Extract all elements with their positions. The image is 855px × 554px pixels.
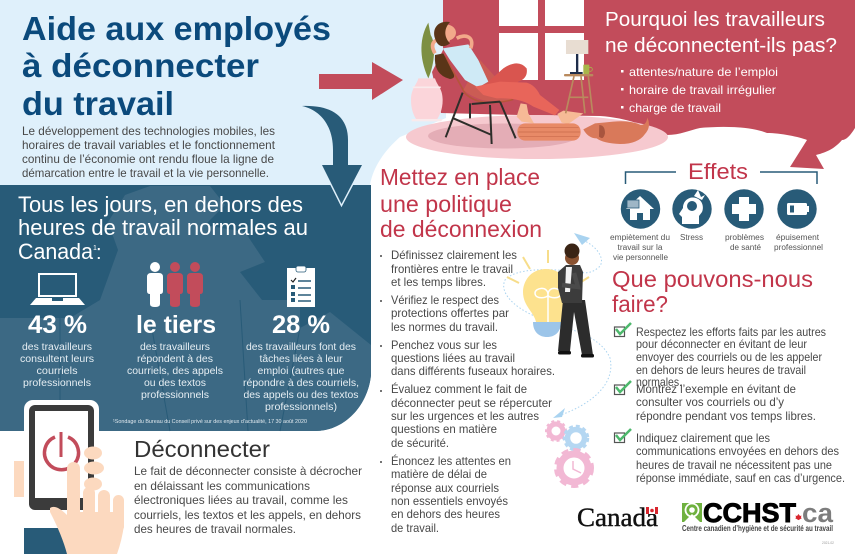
list: what can we do: Respectez les efforts faits par les autres (636, 326, 826, 339)
list: policy actions: sur les urgences et les autres (391, 410, 539, 423)
list: policy actions: de travail. (391, 522, 439, 535)
text block: definition of disconnecting: courriels, les textos et les appels, en dehors (134, 509, 361, 522)
woman, chair, plant, lamp and dog (411, 22, 649, 144)
intro text block: horaires de travail variables et le fonctionnement (22, 139, 276, 152)
list: policy actions: matière de délai de (391, 468, 487, 481)
heading: mettez en place une politique de déconnexion: Mettez en place (380, 164, 540, 190)
footnote: ¹Sondage du Bureau du Conseil privé sur des enjeux d’actualité, 17 30 août 2020 (113, 419, 307, 425)
stat: 28 %: emploi (autres que (258, 366, 345, 377)
stat: 43 %: consultent leurs (20, 354, 94, 365)
icon: clipboard checklist (287, 266, 315, 307)
text block: definition of disconnecting: électroniques liées au travail, comme les (134, 494, 348, 507)
heading: mettez en place une politique de déconnexion: une politique (380, 191, 512, 217)
title (22, 11, 331, 123)
lamp, mug and side table (566, 40, 588, 54)
list: what can we do: réponse immédiate, sauf en cas d’urgence. (636, 472, 845, 485)
list: what can we do: consulter vos courriels ou d’y (636, 396, 784, 409)
icon: work encroaching on home (621, 189, 660, 229)
list: what can we do: normales. (636, 376, 682, 389)
list: policy actions (380, 249, 555, 535)
icon: three people, one white and two red (147, 262, 203, 307)
text block: definition of disconnecting: en délaissant les communications (134, 480, 310, 493)
stat: 43 %: 43 % (28, 311, 87, 339)
icon: laptop (30, 274, 85, 305)
heading: déconnecter: Déconnecter (134, 436, 270, 462)
stat: 28 %: tâches liées à leur (260, 354, 343, 365)
heading: every day outside working hours: : (96, 242, 102, 264)
title: à déconnecter (22, 48, 259, 85)
rug (406, 115, 668, 159)
stat: le tiers: courriels, des appels (127, 366, 223, 377)
logo: CCHST.ca (682, 498, 834, 533)
window (499, 0, 584, 80)
dog (583, 117, 649, 144)
heading: que pouvons-nous faire: Que pouvons-nous (612, 266, 813, 292)
stat: le tiers: répondent à des (137, 354, 213, 365)
list: policy actions: Évaluez comment le fait de (391, 383, 527, 396)
arrow: red arrow pointing to the illustration (319, 62, 403, 100)
intro text block: continu de l’économie ont rendu floue la ligne de (22, 153, 274, 166)
labels: effects: problèmes (725, 233, 764, 242)
list: policy actions: frontières entre le travail (391, 263, 513, 276)
illustration: thinking man in a suit (558, 244, 594, 358)
list: reasons: attentes/nature de l’emploi (629, 66, 778, 79)
heading: every day outside working hours (18, 192, 308, 264)
list: policy actions: Vérifiez le respect des (391, 294, 499, 307)
illustration: light bulb (507, 250, 589, 337)
stat: le tiers: le tiers (136, 311, 216, 339)
icon: low battery (777, 189, 817, 229)
title: du travail (22, 86, 174, 123)
heading: every day outside working hours: Canada (18, 239, 94, 264)
list: policy actions: Définissez clairement les (391, 249, 517, 262)
list: policy actions: non essentiels envoyés (391, 495, 508, 508)
list: policy actions: Énoncez les attentes en (391, 455, 511, 468)
list: what can we do: envoyer des courriels ou de les appeler (636, 351, 822, 364)
title: Aide aux employés (22, 11, 331, 48)
intro text block: Le développement des technologies mobiles, les (22, 125, 275, 138)
labels: effects: empiètement du (610, 233, 670, 242)
stat: 28 % (243, 311, 359, 413)
icons: green check boxes (614, 323, 631, 442)
list: what can we do: heures de travail ne nécessitent pas une (636, 459, 832, 472)
list: reasons: charge de travail (629, 102, 721, 115)
stat: le tiers: professionnels (141, 390, 209, 401)
icon: stress head (672, 189, 712, 229)
panel: red banner why workers do not disconnect (432, 0, 855, 169)
panel: statistics on a map of Canada (0, 185, 371, 431)
stat: 43 %: professionnels (23, 378, 91, 389)
list: policy actions: questions liées au travail (391, 352, 515, 365)
illustration: gears and clock (546, 421, 592, 486)
heading: every day outside working hours: Tous les jours, en dehors des (18, 192, 303, 217)
text block: definition of disconnecting: Le fait de déconnecter consiste à décrocher (134, 465, 362, 478)
heading: que pouvons-nous faire (612, 266, 813, 317)
heading: que pouvons-nous faire: faire? (612, 291, 668, 317)
stat: 28 %: 28 % (272, 311, 330, 339)
stat: 28 %: des appels ou des textos (244, 390, 359, 401)
list: policy actions: et les temps libres. (391, 276, 486, 289)
labels: effects: de santé (730, 243, 762, 252)
heading: pourquoi: ne déconnectent-ils pas? (605, 34, 837, 57)
list: what can we do: pour déconnecter en évitant de leur (636, 338, 807, 351)
labels: effects: travail sur la (618, 243, 663, 252)
stat: 28 %: des travailleurs font des (246, 342, 356, 353)
list: policy actions: les normes du travail. (391, 321, 498, 334)
intro text block: démarcation entre le travail et la vie personnelle. (22, 167, 269, 180)
list: what can we do: Indiquez clairement que les (636, 432, 770, 445)
list: policy actions: Penchez vous sur les (391, 339, 497, 352)
heading: every day outside working hours: 1 (93, 245, 97, 252)
list: reasons (621, 66, 778, 115)
icon: health cross (724, 189, 764, 229)
section: effects (610, 159, 823, 262)
labels: effects (610, 233, 823, 262)
heading: mettez en place une politique de déconnexion (380, 164, 542, 242)
logo: CCHST.ca: ca (802, 498, 834, 528)
list: policy actions: réponse aux courriels (391, 482, 499, 495)
stat: le tiers (127, 311, 223, 401)
text block: definition of disconnecting: des heures de travail normales. (134, 523, 296, 536)
heading: every day outside working hours: heures de travail normales au (18, 215, 308, 240)
logo: Canada wordmark: Canada (577, 503, 658, 532)
labels: effects: vie personnelle (613, 253, 669, 262)
stat: 28 %: professionnels) (265, 402, 337, 413)
stat: 43 % (20, 311, 94, 389)
heading: effets: Effets (688, 159, 748, 184)
list: policy actions: déconnecter peut se répercuter (391, 397, 552, 410)
background: light blue header area (0, 0, 446, 186)
list: what can we do: répondre pendant vos temps libres. (636, 410, 816, 423)
intro text block (22, 125, 276, 180)
heading: pourquoi: Pourquoi les travailleurs (605, 8, 825, 31)
list: reasons: horaire de travail irrégulier (629, 84, 776, 97)
stat: 28 %: répondre à des courriels, (243, 378, 359, 389)
stat: 43 %: courriels (36, 366, 78, 377)
heading: mettez en place une politique de déconnexion: de déconnexion (380, 216, 542, 242)
logo: CCHST.ca: CCHST (703, 498, 797, 528)
stat: le tiers: ou des textos (144, 378, 206, 389)
list: what can we do: communications envoyées en dehors des (636, 445, 839, 458)
list: policy actions: dans différents fuseaux horaires. (391, 365, 555, 378)
arrow: curved dark blue arrow from intro to panel (302, 106, 362, 204)
illustration: hand holding a phone with power symbol (14, 400, 124, 554)
labels: effects: professionnel (774, 243, 823, 252)
list: policy actions: questions en matière (391, 423, 497, 436)
list: policy actions: en dehors des heures (391, 508, 500, 521)
date code: 2021-02 (822, 540, 835, 545)
stat: le tiers: des travailleurs (140, 342, 210, 353)
heading: pourquoi (605, 8, 837, 57)
text block: definition of disconnecting (134, 465, 362, 536)
list: policy actions: de sécurité. (391, 437, 449, 450)
list: what can we do: en dehors de leurs heures de travail (636, 364, 806, 377)
stat: 43 %: des travailleurs (22, 342, 92, 353)
list: what can we do (636, 326, 845, 485)
labels: effects: épuisement (776, 233, 820, 242)
list: policy actions: protections offertes par (391, 307, 509, 320)
list: what can we do: Montrez l’exemple en évitant de (636, 383, 796, 396)
illustration: woman relaxing in a chair at home (406, 0, 668, 159)
dotted flow line with arrows (504, 233, 611, 418)
labels: effects: Stress (680, 233, 703, 242)
